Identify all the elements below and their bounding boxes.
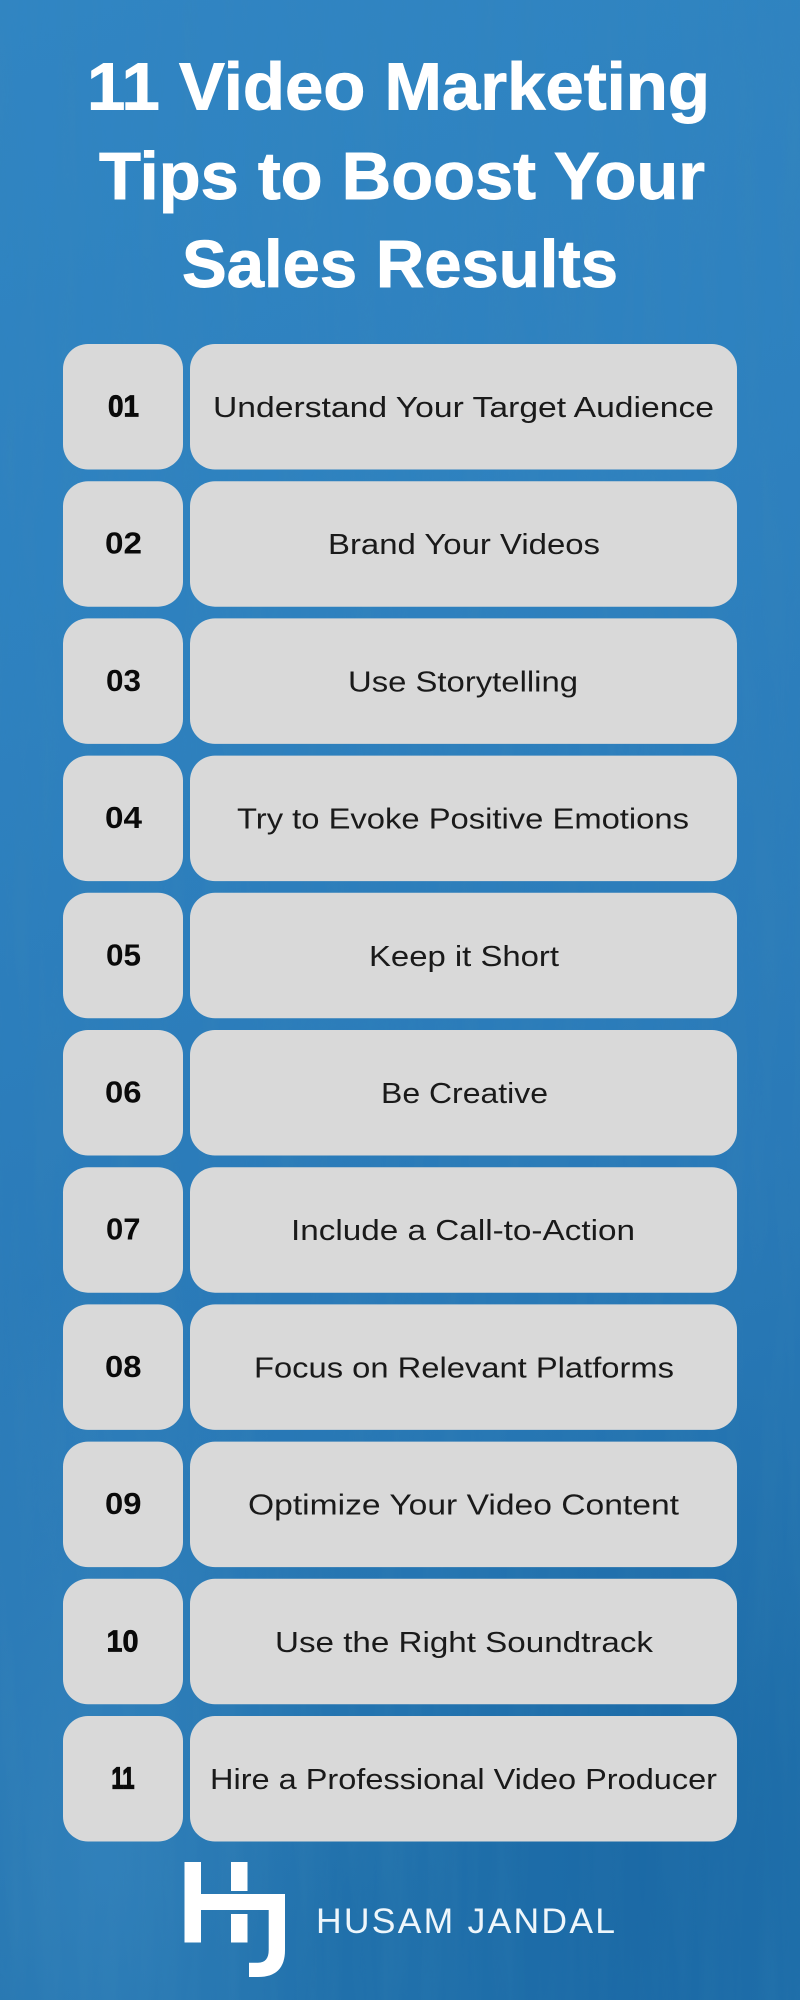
tip row 02: 02 — [105, 526, 142, 561]
tip row 09: 09 — [105, 1486, 142, 1521]
tip row 10: 10 — [106, 1623, 138, 1658]
tip row 09 — [63, 1442, 737, 1567]
tip row 05 — [63, 893, 737, 1018]
tip row 01: Understand Your Target Audience — [213, 392, 714, 424]
title — [87, 50, 710, 302]
tip row 04: Try to Evoke Positive Emotions — [237, 804, 689, 836]
tip row 11: 11 — [112, 1760, 134, 1796]
tip row 04: 04 — [105, 800, 143, 835]
title: Sales Results — [182, 227, 618, 302]
tip row 02: Brand Your Videos — [328, 529, 600, 561]
tip row 09: Optimize Your Video Content — [248, 1490, 679, 1522]
tip row 05: Keep it Short — [369, 941, 559, 973]
tip row 08: Focus on Relevant Platforms — [254, 1352, 674, 1384]
tip row 03 — [63, 618, 737, 744]
tip row 05: 05 — [106, 937, 141, 972]
tip row 07: 07 — [106, 1212, 140, 1247]
tip row 08: 08 — [105, 1349, 142, 1384]
tip row 11: Hire a Professional Video Producer — [210, 1764, 717, 1796]
tip row 06: 06 — [105, 1074, 142, 1110]
tip row 10 — [63, 1579, 737, 1704]
tip row 04 — [63, 756, 737, 881]
tip row 11 — [63, 1716, 737, 1842]
title: 11 Video Marketing — [87, 50, 710, 124]
title: Tips to Boost Your — [99, 139, 705, 214]
tip row 03: 03 — [106, 663, 141, 698]
logo: HJ monogram — [184, 1862, 285, 1977]
logo wordmark: HUSAM JANDAL — [316, 1901, 615, 1941]
tip row 07: Include a Call-to-Action — [291, 1215, 635, 1247]
tip row 01 — [63, 344, 737, 470]
tip row 06: Be Creative — [381, 1078, 548, 1110]
tip row 08 — [63, 1304, 737, 1430]
tip row 10: Use the Right Soundtrack — [275, 1627, 654, 1659]
tip row 06 — [63, 1030, 737, 1156]
tip row 01: 01 — [108, 388, 139, 424]
tip row 02 — [63, 481, 737, 607]
tip row 07 — [63, 1167, 737, 1293]
tip row 03: Use Storytelling — [348, 666, 578, 698]
